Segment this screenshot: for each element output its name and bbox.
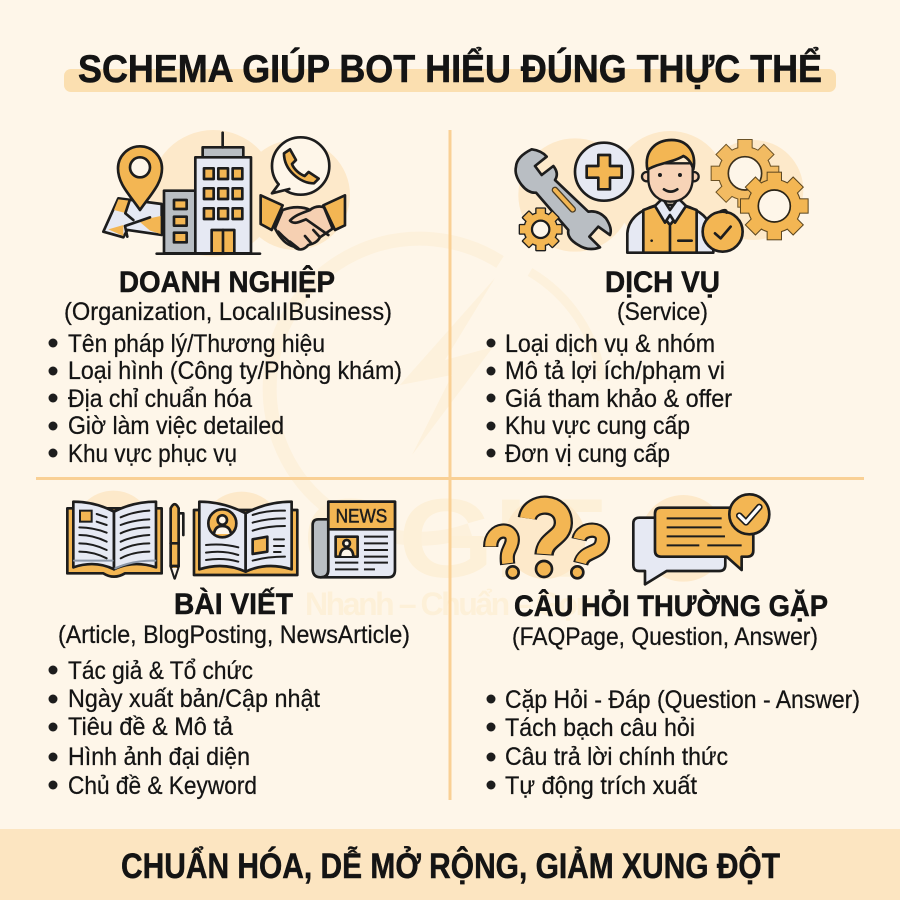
bullet list: Tên pháp lý/Thương hiệu — [68, 330, 325, 358]
watermark logo: OGIT — [303, 476, 603, 601]
bullet list: Mô tả lợi ích/phạm vi — [505, 357, 725, 385]
footer banner — [0, 829, 900, 900]
subtitle: (Service) — [617, 298, 708, 326]
bullet list: Đơn vị cung cấp — [505, 440, 670, 468]
bullet list: Khu vực phục vụ — [68, 440, 237, 468]
bullet list — [486, 330, 732, 468]
icon: open books, pen and newspaper — [67, 491, 395, 578]
bullet list: Giá tham khảo & offer — [505, 385, 732, 413]
icon: open books, pen and newspaper: NEWS — [336, 507, 387, 528]
bullet list: Giờ làm việc detailed — [68, 412, 284, 440]
footer banner: CHUẨN HÓA, DỄ MỞ RỘNG, GIẢM XUNG ĐỘT — [121, 846, 780, 886]
bullet list: Câu trả lời chính thức — [505, 743, 728, 771]
panel: dịch vụ — [486, 131, 808, 468]
subtitle: (Organization, LocalıIBusiness) — [64, 298, 392, 326]
panel: doanh nghiệp — [48, 130, 402, 468]
icon: wrench, mechanic and gears — [516, 131, 808, 253]
bullet list: Ngày xuất bản/Cập nhật — [68, 685, 320, 713]
bullet list — [48, 657, 320, 800]
bullet list: Khu vực cung cấp — [505, 412, 690, 440]
watermark logo: Nhanh – Chuẩn – Gọn — [305, 586, 595, 622]
bullet list: Hình ảnh đại diện — [68, 743, 250, 771]
icon: question marks and chat bubbles — [491, 494, 769, 584]
bullet list: Tự động trích xuất — [505, 772, 697, 800]
bullet list: Tác giả & Tổ chức — [68, 657, 253, 685]
bullet list: Địa chỉ chuẩn hóa — [68, 385, 252, 413]
heading: DỊCH VỤ — [605, 266, 720, 299]
bullet list: Chủ đề & Keyword — [68, 772, 257, 800]
panel: câu hỏi thường gặp — [486, 494, 860, 800]
bullet list — [486, 686, 860, 800]
bullet list: Cặp Hỏi - Đáp (Question - Answer) — [505, 686, 860, 714]
title: SCHEMA GIÚP BOT HIỂU ĐÚNG THỰC THỂ — [78, 46, 822, 91]
bullet list: Loại dịch vụ & nhóm — [505, 330, 715, 358]
subtitle: (Article, BlogPosting, NewsArticle) — [58, 621, 410, 649]
icon: business location, building and handshake — [103, 130, 350, 257]
heading: BÀI VIẾT — [174, 587, 293, 621]
bullet list: Tách bạch câu hỏi — [505, 714, 695, 742]
panel: bài viết — [48, 491, 410, 800]
heading: CÂU HỎI THƯỜNG GẶP — [514, 589, 828, 623]
bullet list: Loại hình (Công ty/Phòng khám) — [68, 357, 402, 385]
heading: DOANH NGHIỆP — [119, 265, 335, 299]
subtitle: (FAQPage, Question, Answer) — [512, 623, 818, 651]
watermark logo — [270, 239, 603, 622]
bullet list — [48, 330, 402, 468]
bullet list: Tiêu đề & Mô tả — [68, 713, 233, 741]
